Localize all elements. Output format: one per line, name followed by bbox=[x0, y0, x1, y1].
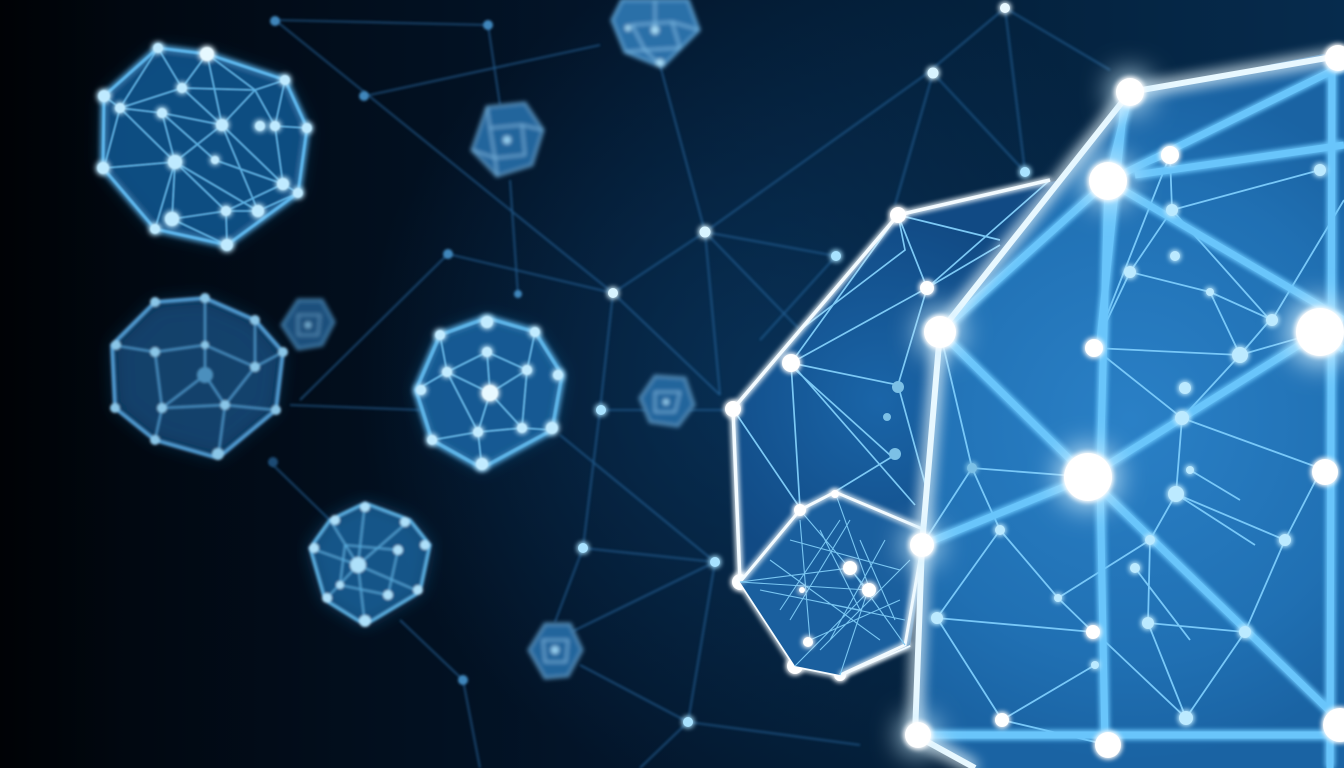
background nodes bbox=[578, 3, 1030, 727]
polyhedron: middle left bbox=[110, 293, 288, 460]
fill bbox=[918, 50, 1344, 768]
background network lines bbox=[270, 8, 1110, 768]
small polyhedron: upper middle bbox=[472, 103, 543, 176]
small polyhedron: right bbox=[640, 376, 694, 426]
small polyhedron: top bbox=[612, 0, 699, 67]
bright outer edges bbox=[915, 55, 1344, 768]
bright nodes bbox=[905, 45, 1344, 758]
polyhedron: center bbox=[416, 316, 563, 470]
small polyhedron: left bbox=[282, 300, 334, 349]
polyhedron: small, foreground bbox=[740, 490, 925, 675]
small polyhedra bbox=[282, 0, 699, 678]
outer edges bbox=[733, 180, 1050, 675]
thin inner edges bbox=[733, 180, 1050, 520]
polyhedron: top left bbox=[97, 43, 312, 251]
thin inner edges bbox=[922, 155, 1344, 745]
small nodes bbox=[931, 164, 1326, 725]
polyhedron: bottom center bbox=[309, 502, 430, 627]
thick inner edges bbox=[918, 60, 1344, 768]
polyhedron: medium, middle right bbox=[725, 180, 1060, 681]
polyhedron: large foreground bbox=[900, 45, 1344, 768]
small polyhedron: bottom bbox=[529, 624, 582, 678]
fill bbox=[733, 180, 1060, 675]
halo nodes bbox=[900, 72, 1344, 753]
